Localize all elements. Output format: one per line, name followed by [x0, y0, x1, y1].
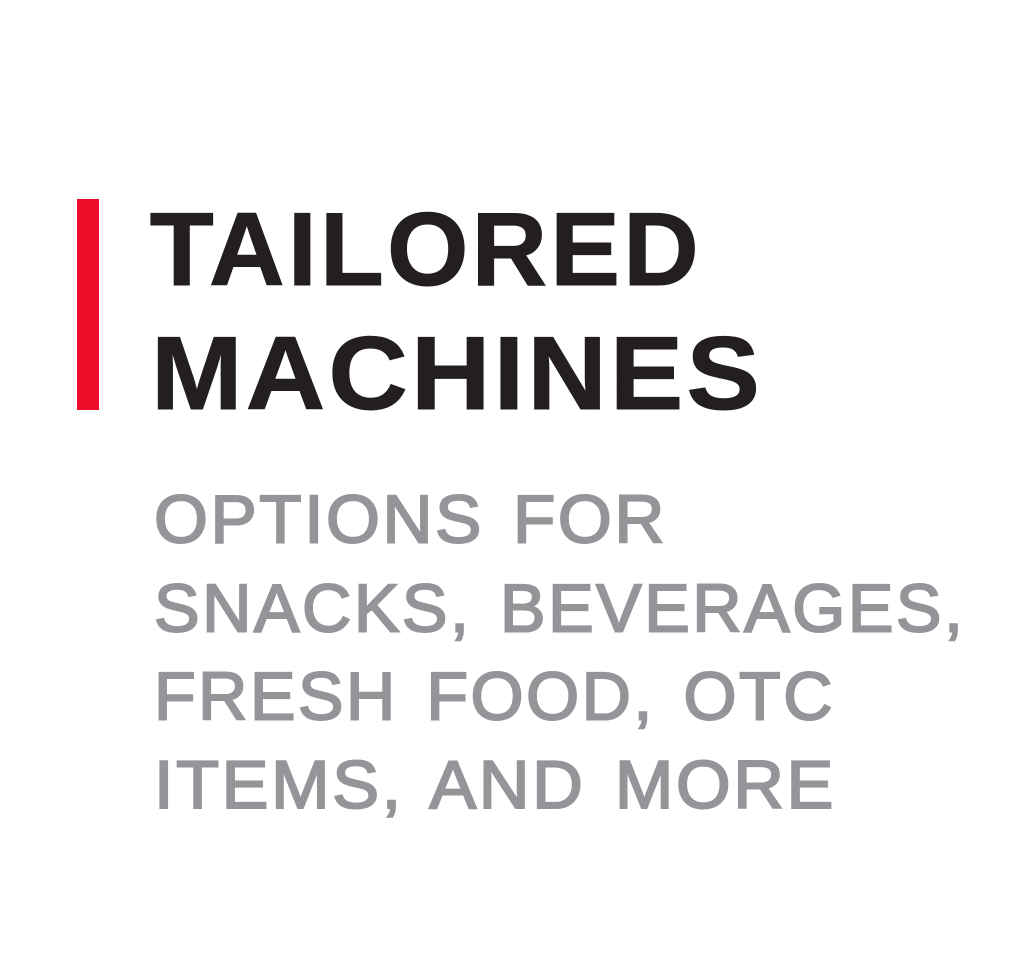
subtitle text block: ITEMS, AND MORE [154, 748, 836, 823]
red accent bar [77, 199, 99, 410]
title [150, 191, 763, 431]
subtitle text block: SNACKS, BEVERAGES, [154, 571, 966, 646]
subtitle text block: OPTIONS FOR [154, 482, 667, 557]
title: TAILORED [150, 191, 702, 307]
subtitle text block: FRESH FOOD, OTC [154, 660, 835, 735]
title: MACHINES [151, 315, 763, 431]
subtitle text block [154, 482, 966, 823]
